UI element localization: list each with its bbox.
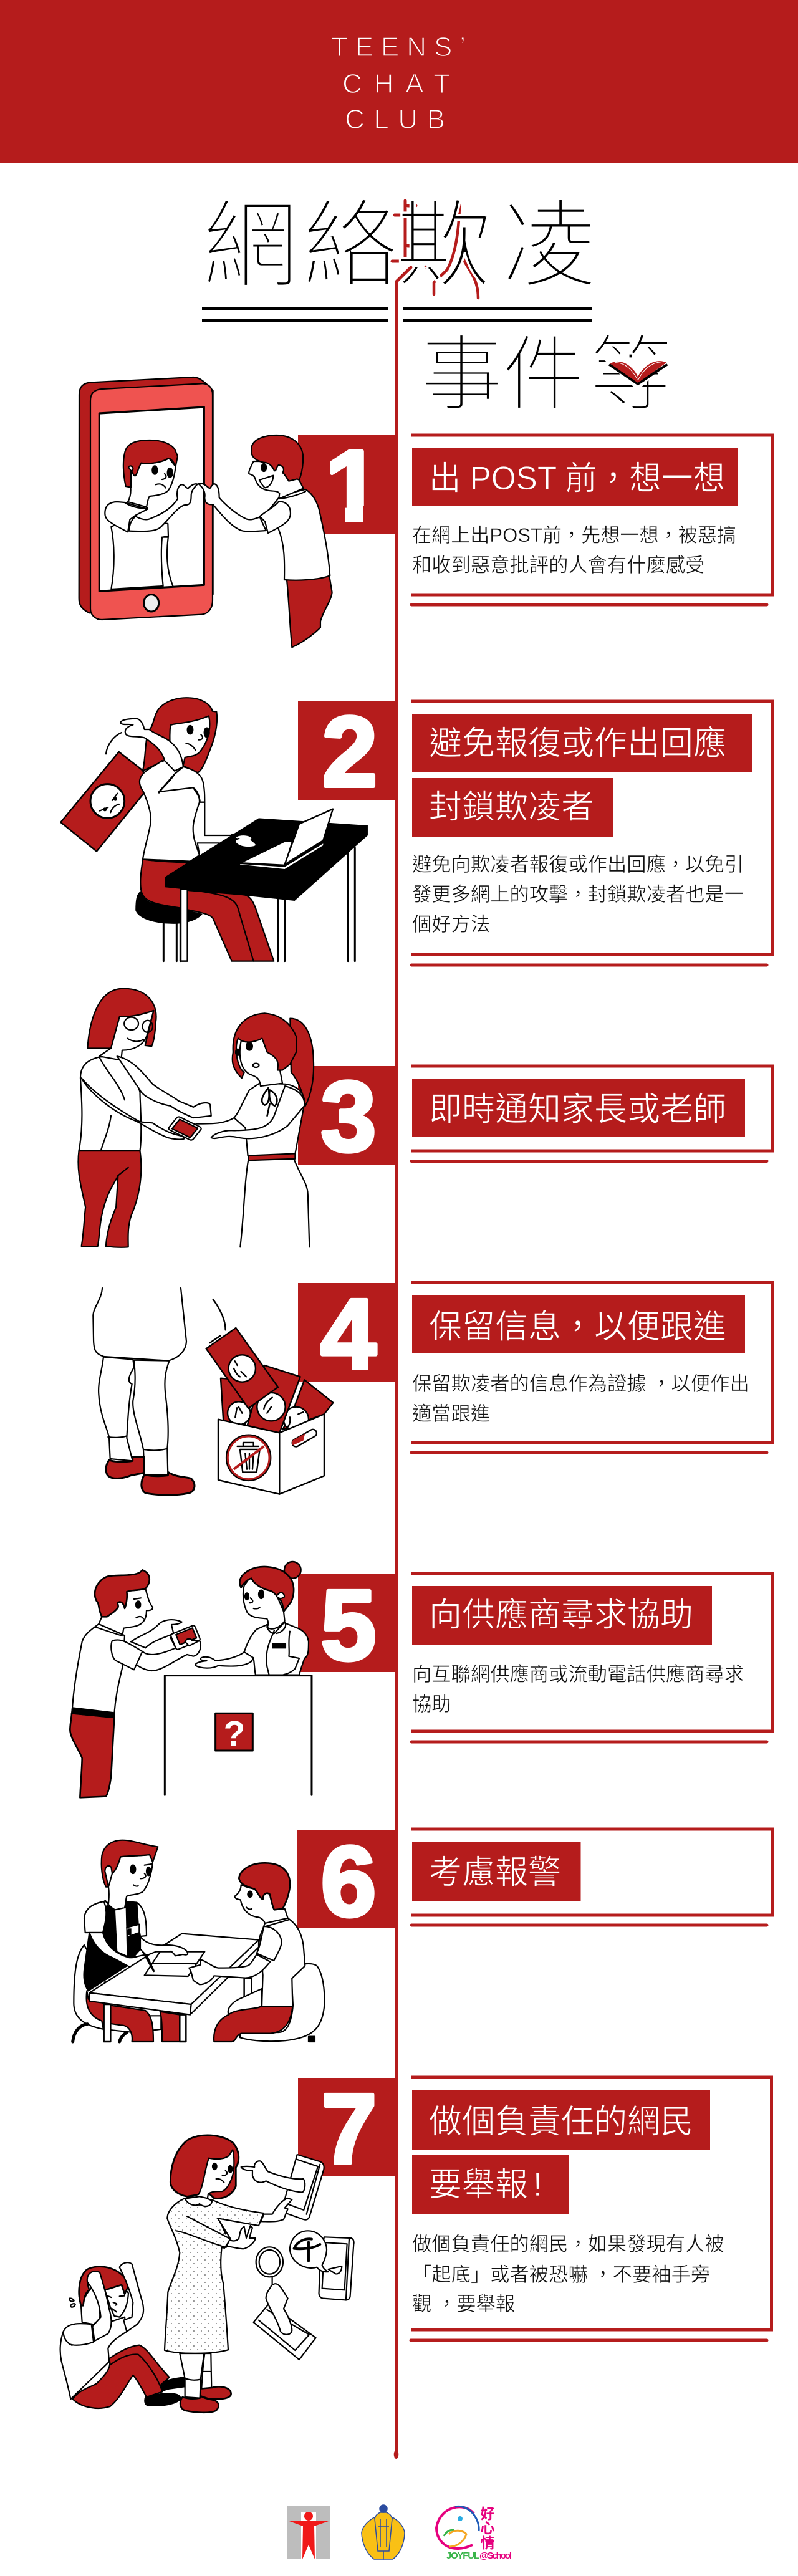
panel 2 xyxy=(411,701,772,965)
panel 1: 在網上出POST前，先想一想，被惡搞 xyxy=(412,524,736,546)
reflected boy xyxy=(105,440,198,589)
panel 2: 發更多網上的攻擊，封鎖欺凌者也是一 xyxy=(412,883,744,905)
angry message card xyxy=(60,733,143,852)
officer xyxy=(84,1840,180,2042)
legs and shoes xyxy=(93,1288,195,1495)
panel 4: 適當跟進 xyxy=(412,1403,490,1425)
desk and laptop xyxy=(165,809,368,961)
number block 3 xyxy=(298,1060,397,1172)
no-trash sign xyxy=(226,1435,271,1481)
panel 4 xyxy=(411,1282,772,1453)
number block 4 xyxy=(298,1278,397,1390)
phone xyxy=(79,377,213,620)
phone being shown xyxy=(168,1116,202,1141)
panel 7: 要舉報! xyxy=(429,2166,542,2203)
panel 3: 即時通知家長或老師 xyxy=(429,1091,726,1128)
teacher xyxy=(78,989,211,1247)
seated victim xyxy=(60,2262,185,2408)
panel 1: 和收到惡意批評的人會有什麼感受 xyxy=(412,554,704,576)
header title: Teens' Chat Club xyxy=(331,32,466,135)
girl xyxy=(120,698,274,961)
logo: Joyful at School: @School xyxy=(479,2550,512,2561)
complainant xyxy=(189,1863,324,2042)
number block 3: 3 xyxy=(321,1060,376,1172)
counter: ? xyxy=(224,1714,245,1754)
panel 7: 「起底」或者被恐嚇 ，不要袖手旁 xyxy=(412,2264,710,2285)
logo: Joyful at School xyxy=(436,2506,512,2561)
motion marks xyxy=(210,1299,226,1343)
number block 7: 7 xyxy=(322,2073,377,2184)
panel 4: 保留欺凌者的信息作為證據 ，以便作出 xyxy=(412,1373,749,1395)
number block 6 xyxy=(297,1825,397,1937)
panel 5: 向互聯網供應商或流動電話供應商尋求 xyxy=(412,1663,744,1685)
number block 5 xyxy=(298,1569,397,1681)
panel 3 xyxy=(411,1066,772,1161)
woman xyxy=(165,2135,292,2413)
panel 2: 封鎖欺凌者 xyxy=(429,789,594,825)
panel 5: 向供應商尋求協助 xyxy=(429,1597,693,1633)
number block 2: 2 xyxy=(322,696,377,807)
panel 5 xyxy=(411,1574,772,1742)
icon: open book xyxy=(602,357,671,391)
panel 5: 協助 xyxy=(412,1693,451,1715)
student xyxy=(196,1013,314,1247)
header title: Teens' Chat Club: TEENS’ xyxy=(331,32,466,62)
man xyxy=(70,1570,201,1797)
panel 6 xyxy=(411,1829,772,1925)
header title: Teens' Chat Club: CHAT xyxy=(342,69,450,99)
illustration 5: asking provider at counter xyxy=(70,1562,312,1797)
number block 1: 1 xyxy=(325,430,380,541)
panel 4: 保留信息，以便跟進 xyxy=(429,1309,726,1345)
panel 7 xyxy=(411,2077,772,2340)
illustration 4: keeping evidence in a box xyxy=(93,1288,333,1495)
number block 1 xyxy=(298,430,397,541)
number block 5: 5 xyxy=(321,1569,376,1681)
subtitle: 事件等 xyxy=(421,329,671,420)
number block 7 xyxy=(298,2073,397,2184)
clerk xyxy=(195,1562,309,1675)
stool xyxy=(136,892,201,961)
panel 7: 做個負責任的網民，如果發現有人被 xyxy=(412,2233,724,2255)
illustration 1: boys at phone mirror xyxy=(79,377,332,647)
table and forms xyxy=(89,1934,259,2042)
officer chair xyxy=(73,1945,161,2042)
illustration 6: reporting to police xyxy=(73,1840,324,2042)
header title: Teens' Chat Club: CLUB xyxy=(345,104,445,135)
panel 1: 出 POST 前，想一想 xyxy=(429,460,725,497)
header band xyxy=(0,0,798,163)
number block 6: 6 xyxy=(321,1825,376,1937)
logo: Joyful at School: 好 xyxy=(480,2506,495,2522)
logo: medical cross man xyxy=(287,2506,330,2559)
logo: Joyful at School: 情 xyxy=(480,2535,495,2551)
counter xyxy=(165,1676,312,1795)
discarded cards xyxy=(206,1328,333,1433)
panel 6: 考慮報警 xyxy=(429,1854,561,1891)
logo: Joyful at School: JOYFUL xyxy=(446,2550,479,2561)
logo: Joyful at School: 心 xyxy=(480,2520,495,2536)
panel 7: 觀 ，要舉報 xyxy=(412,2293,515,2315)
panel 7: 做個負責任的網民 xyxy=(429,2103,693,2140)
phones and hands xyxy=(241,2155,354,2360)
logo: yellow hands xyxy=(362,2505,405,2559)
box xyxy=(218,1414,324,1494)
main title: 網絡欺凌 xyxy=(203,193,597,299)
panel 1 xyxy=(411,435,772,605)
number block 4: 4 xyxy=(321,1278,377,1390)
illustration 7: standing up against doxxing xyxy=(60,2135,354,2413)
double rules under title xyxy=(202,307,592,322)
number block 2 xyxy=(298,696,397,807)
smiling boy xyxy=(198,435,332,647)
timeline spine with crack strokes xyxy=(392,201,478,2459)
illustration 3: telling a teacher xyxy=(78,989,314,1247)
panel 2: 避免報復或作出回應 xyxy=(429,725,726,762)
panel 2: 避免向欺凌者報復或作出回應，以免引 xyxy=(412,853,744,875)
illustration 2: girl tearing message at desk xyxy=(60,698,368,961)
panel 2: 個好方法 xyxy=(412,913,490,935)
